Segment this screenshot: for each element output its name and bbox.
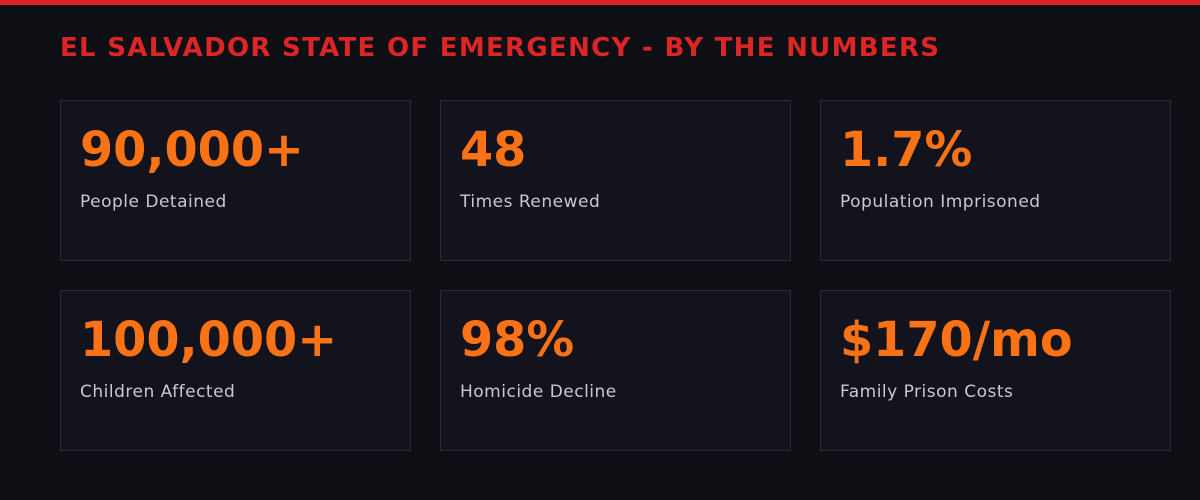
panel: family prison costs [820, 290, 1171, 451]
panel: children affected [60, 290, 411, 451]
stat number: $170/mo [840, 313, 1073, 368]
stat label: People Detained [80, 192, 227, 212]
panel: population imprisoned [820, 100, 1171, 261]
stat number: 98% [460, 313, 574, 368]
stat number: 100,000+ [80, 313, 337, 368]
stat number: 48 [460, 123, 526, 178]
panel: times renewed [440, 100, 791, 261]
title: EL SALVADOR STATE OF EMERGENCY - BY THE NUMBERS [60, 33, 940, 63]
stat label: Children Affected [80, 382, 235, 402]
stat label: Family Prison Costs [840, 382, 1013, 402]
stat label: Times Renewed [460, 192, 600, 212]
stat label: Population Imprisoned [840, 192, 1041, 212]
panel: homicide decline [440, 290, 791, 451]
stat number: 90,000+ [80, 123, 304, 178]
stat label: Homicide Decline [460, 382, 617, 402]
stat number: 1.7% [840, 123, 972, 178]
panel: people detained [60, 100, 411, 261]
